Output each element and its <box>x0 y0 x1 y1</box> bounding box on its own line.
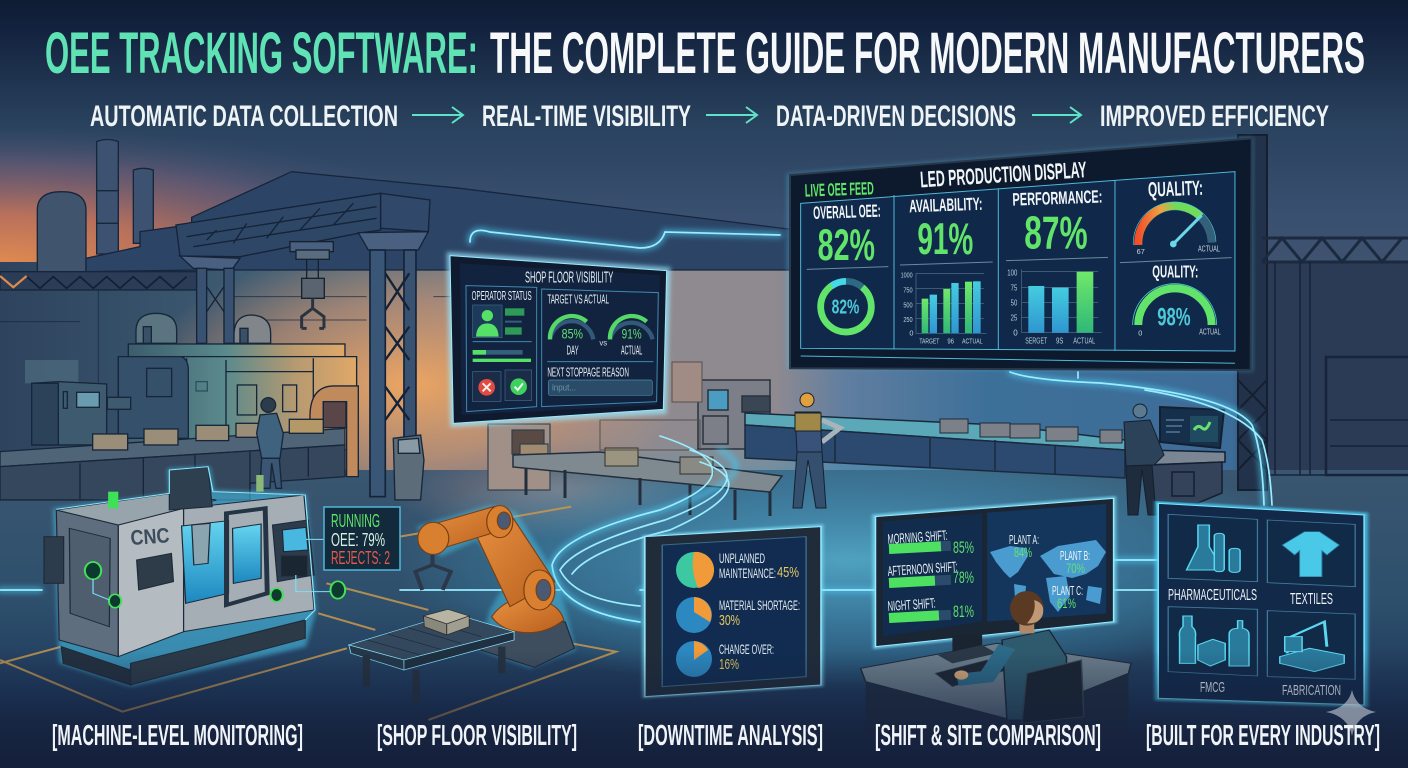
downtime labels: 45% <box>777 564 799 581</box>
KPI: quality gauge bottom: 98% <box>1157 304 1191 331</box>
downtime labels: UNPLANNED <box>719 550 765 566</box>
LED production display <box>787 137 1253 372</box>
performance bar chart: 75 <box>1011 284 1018 293</box>
boxes on conveyor <box>93 419 323 450</box>
inspection machine <box>698 380 770 449</box>
step 3: DATA-DRIVEN DECISIONS <box>776 100 1016 133</box>
sensor nodes <box>85 562 345 608</box>
background: floor <box>0 470 1408 768</box>
arrow 1 <box>412 107 463 123</box>
terminal desk <box>1145 450 1225 503</box>
factory silhouette <box>0 139 823 447</box>
worker right at terminal <box>1124 404 1164 515</box>
KPI: quality gauge top: QUALITY: <box>1148 177 1203 202</box>
machine body <box>118 357 357 450</box>
terminal monitor <box>1160 407 1224 448</box>
target vs actual gauges: 85% <box>562 325 583 341</box>
machine status callout: OEE: 79% <box>331 530 385 550</box>
background production machinery <box>0 313 424 500</box>
performance bar chart: SERGET <box>1025 336 1047 345</box>
KPI: quality gauge bottom: QUALITY: <box>1152 261 1198 281</box>
KPI: quality gauge top: ACTUAL <box>1198 244 1220 253</box>
machine status callout: REJECTS: 2 <box>331 548 390 568</box>
caption 3: [DOWNTIME ANALYSIS] <box>638 720 823 752</box>
conveyor table <box>349 613 514 670</box>
downtime analysis tablet <box>642 524 823 698</box>
shift rows: 85% <box>953 538 974 557</box>
pie: unplanned maintenance <box>676 552 714 588</box>
shop floor visibility panel: OPERATOR STATUS <box>472 289 532 303</box>
shift and site comparison workstation <box>861 496 1131 740</box>
left cabinet <box>32 382 107 445</box>
next stoppage reason: NEXT STOPPAGE REASON <box>547 365 629 380</box>
icon: lab glassware <box>1187 525 1240 572</box>
title <box>45 21 1365 86</box>
availability bar chart: 250 <box>903 315 913 324</box>
downtime labels: CHANGE OVER: <box>719 641 774 657</box>
worker at conveyor <box>257 398 283 488</box>
downtime labels: MAINTENANCE: <box>719 565 776 581</box>
availability bar chart: 1000 <box>901 270 913 279</box>
KPI: quality gauge top: 67 <box>1137 247 1145 256</box>
belt and cabinets <box>745 413 1125 478</box>
operator status <box>472 289 532 402</box>
material rollers <box>136 313 271 343</box>
main tower <box>370 250 416 497</box>
availability bar chart: 500 <box>903 300 913 309</box>
light trails <box>0 230 1272 622</box>
next stoppage reason: input... <box>552 383 576 393</box>
boxes on right line <box>940 419 1122 443</box>
display headings: LED PRODUCTION DISPLAY <box>919 156 1087 192</box>
KPI: quality gauge bottom <box>1133 261 1221 337</box>
shift rows: MORNING SHIFT: <box>887 527 948 547</box>
donut chart <box>810 271 882 342</box>
shift rows: NIGHT SHIFT: <box>887 595 936 614</box>
machine outline glow line <box>56 467 315 620</box>
KPI: performance: PERFORMANCE: <box>1012 187 1103 210</box>
bottom vignette <box>0 650 1408 768</box>
storage tank <box>37 192 86 272</box>
built for every industry panel <box>1155 501 1368 707</box>
table legs <box>366 647 502 703</box>
shift rows: 78% <box>953 568 974 587</box>
display headings: LIVE OEE FEED <box>804 178 874 201</box>
shift rows: AFTERNOON SHIFT: <box>887 558 958 579</box>
monitor <box>872 496 1117 663</box>
KPI: quality gauge top <box>1133 177 1220 256</box>
target vs actual gauges <box>547 292 653 362</box>
icon: bottles and box <box>1179 616 1249 666</box>
caption 1: [MACHINE-LEVEL MONITORING] <box>52 720 303 752</box>
caption 2: [SHOP FLOOR VISIBILITY] <box>377 720 577 752</box>
plant labels <box>1009 532 1090 611</box>
downtime labels: 30% <box>719 612 740 629</box>
section captions <box>52 720 1380 752</box>
tunnel <box>310 386 358 477</box>
performance bar chart: 100 <box>1007 268 1018 277</box>
KPI: availability <box>901 194 987 345</box>
conveyor surface <box>513 452 782 520</box>
machine body <box>44 467 314 685</box>
background: sky <box>0 0 1408 310</box>
KPI: availability: 91% <box>917 215 973 264</box>
machine plinth <box>128 344 345 357</box>
shop floor visibility panel: SHOP FLOOR VISIBILITY <box>525 270 613 287</box>
caption 4: [SHIFT & SITE COMPARISON] <box>875 720 1101 752</box>
shift rows <box>887 527 974 623</box>
downtime labels <box>719 550 800 673</box>
machine glow <box>53 467 316 687</box>
glow under trails <box>0 230 1264 622</box>
KPI: overall OEE <box>810 201 882 342</box>
machine window <box>182 508 267 605</box>
KPI: quality gauge bottom: 0 <box>1138 328 1142 337</box>
plant labels: 61% <box>1057 595 1076 611</box>
low building <box>86 227 200 272</box>
step 1: AUTOMATIC DATA COLLECTION <box>90 100 398 133</box>
wall panel lines <box>0 290 460 447</box>
desk <box>861 643 1131 740</box>
background: sunset glow <box>0 130 500 270</box>
robot orange base <box>492 598 564 633</box>
target vs actual gauges: ACTUAL <box>621 344 642 358</box>
target vs actual gauges: TARGET VS ACTUAL <box>547 292 609 306</box>
plant labels: PLANT C: <box>1052 583 1083 598</box>
main building roof <box>192 172 823 270</box>
box on conveyor <box>424 609 469 635</box>
title: OEE TRACKING SOFTWARE: <box>45 21 478 86</box>
performance bar chart <box>1007 268 1102 345</box>
industry labels: TEXTILES <box>1290 591 1333 608</box>
robot gripper <box>415 555 451 590</box>
robot arm links <box>418 506 555 610</box>
donut chart: 82% <box>832 295 859 318</box>
center conveyor with boxes <box>488 362 782 520</box>
performance bar chart: 9S <box>1056 336 1063 345</box>
next stoppage reason <box>547 365 652 395</box>
KPI: quality gauge bottom: ACTUAL <box>1199 328 1221 337</box>
control kiosk <box>393 435 424 500</box>
worker center in hard hat <box>793 393 840 508</box>
background: factory wall <box>0 262 1408 482</box>
CNC label text: CNC <box>130 524 170 550</box>
machine status callout: RUNNING <box>331 511 380 531</box>
icon: shirt <box>1282 532 1339 577</box>
performance bar chart: ACTUAL <box>1073 336 1096 345</box>
tablet frame <box>642 524 823 698</box>
icon: fabrication machine <box>1280 622 1344 672</box>
pie: material shortage <box>676 597 712 633</box>
plant labels: 84% <box>1014 544 1032 560</box>
background: floor teal glow <box>390 430 1310 690</box>
downtime labels: MATERIAL SHORTAGE: <box>719 597 800 613</box>
CNC machine <box>44 467 345 687</box>
performance bar chart: 0 <box>1013 328 1018 337</box>
KPI: performance: 87% <box>1024 206 1088 258</box>
floor lane markings <box>0 507 616 720</box>
industry labels <box>1168 587 1341 699</box>
panel frame <box>1155 501 1368 707</box>
KPI: availability: AVAILABILITY: <box>909 194 983 216</box>
arrow 2 <box>706 107 757 123</box>
performance bar chart: 25 <box>1011 313 1018 322</box>
stacked crates behind <box>600 362 702 450</box>
availability bar chart <box>901 270 987 345</box>
background: warm interior light <box>140 245 680 525</box>
industry labels: PHARMACEUTICALS <box>1168 587 1257 604</box>
stop and ok buttons <box>478 379 495 396</box>
sparkle watermark <box>1326 690 1376 736</box>
right wall panels and door <box>1268 262 1408 475</box>
right truss <box>1262 238 1408 262</box>
truss rail <box>0 272 197 290</box>
shift rows: 81% <box>953 602 974 621</box>
crane truss beam <box>176 193 430 270</box>
bright trail lines <box>0 230 1272 622</box>
KPI: overall OEE: 82% <box>818 221 875 270</box>
background: floor warm patch <box>390 440 730 540</box>
control panels <box>137 520 314 590</box>
target vs actual gauges: DAY <box>567 344 579 358</box>
right tower <box>1238 135 1267 490</box>
availability bar chart: 96 <box>947 336 954 345</box>
KPI: performance <box>1007 187 1103 345</box>
world map blobs <box>990 540 1106 612</box>
process flow strip <box>90 100 1329 133</box>
industry labels: FABRICATION <box>1282 682 1341 699</box>
panel frame <box>447 252 671 427</box>
KPI: overall OEE: OVERALL OEE: <box>813 201 881 223</box>
target vs actual gauges: vs <box>599 338 607 347</box>
overhead gantry crane <box>176 193 430 497</box>
step 2: REAL-TIME VISIBILITY <box>482 100 691 133</box>
display headings <box>804 156 1087 201</box>
right truss and wall panels <box>1238 135 1408 490</box>
plant labels: 70% <box>1066 560 1085 576</box>
hoist and claw <box>290 242 333 328</box>
boxes on center conveyor <box>605 448 713 474</box>
arm glow <box>416 505 575 668</box>
shop floor visibility panel <box>447 252 671 427</box>
arrow 3 <box>1032 107 1081 123</box>
performance bar chart: 50 <box>1011 298 1018 307</box>
conveyor bed <box>0 428 345 467</box>
availability bar chart: 0 <box>909 328 913 337</box>
crane left leg <box>197 268 234 343</box>
display frame <box>787 137 1253 372</box>
availability bar chart: TARGET <box>919 336 940 345</box>
plant labels: PLANT B: <box>1060 548 1090 563</box>
robot pedestal <box>481 622 574 667</box>
machine status callout <box>324 507 400 570</box>
availability bar chart: ACTUAL <box>962 336 983 345</box>
target vs actual gauges: 91% <box>622 325 642 341</box>
sensor wires <box>93 539 330 600</box>
right conveyor line <box>745 413 1125 478</box>
machine behind conveyor <box>488 424 550 490</box>
industry labels: FMCG <box>1200 679 1225 696</box>
chimneys <box>97 139 153 254</box>
keyboard and seated operator <box>935 591 1084 723</box>
downtime labels: 16% <box>719 656 739 673</box>
availability bar chart: 750 <box>903 286 913 295</box>
status beacons <box>108 475 264 508</box>
pie: changeover <box>676 641 712 677</box>
robot arm and conveyor <box>349 505 575 703</box>
plant labels: PLANT A: <box>1009 532 1039 547</box>
